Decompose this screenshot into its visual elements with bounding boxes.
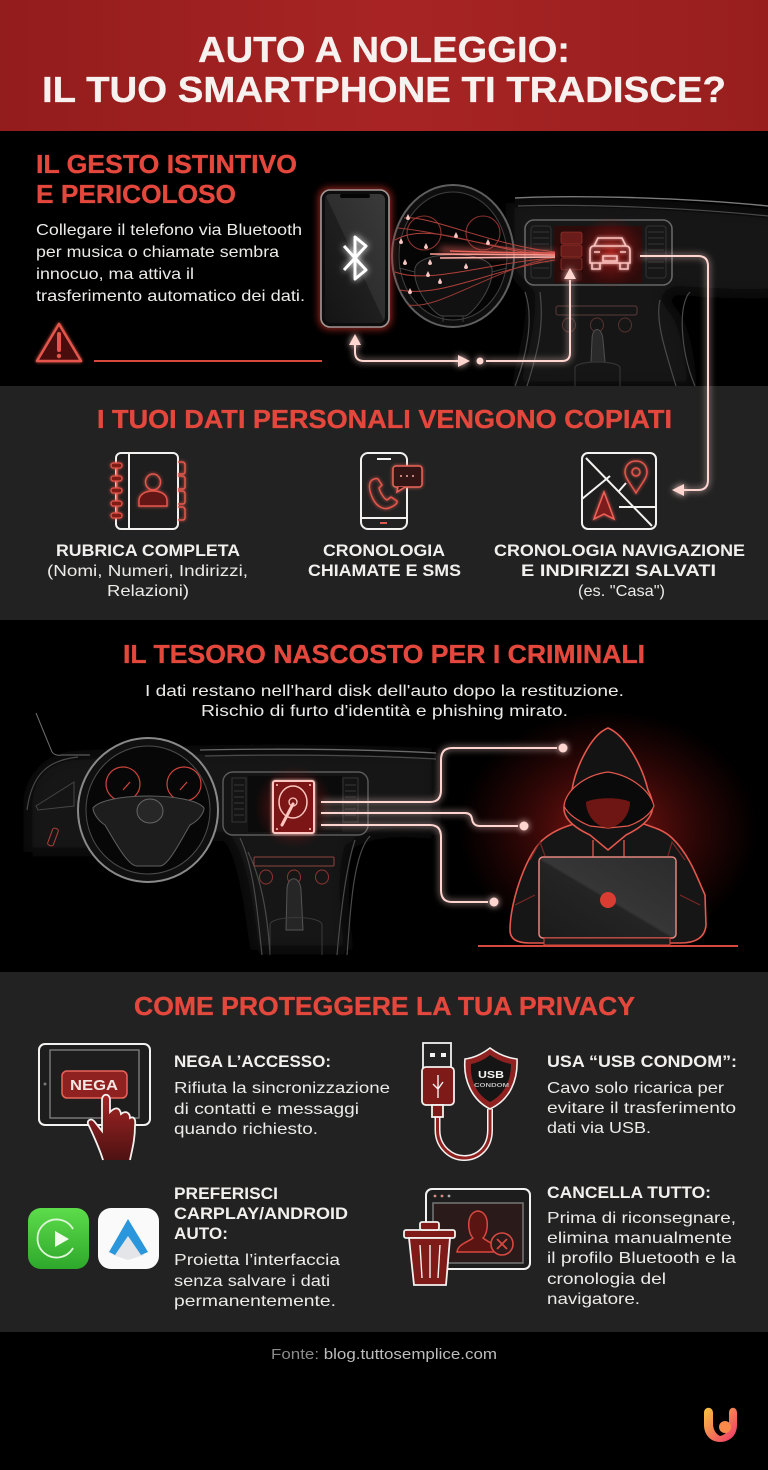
text: nega accesso	[174, 1053, 390, 1138]
label: chiamate: CRONOLOGIA	[323, 542, 445, 560]
title	[42, 29, 726, 110]
heading: il gesto istintivo: E PERICOLOSO	[36, 179, 236, 209]
panel: dati copiati	[0, 386, 768, 620]
text: bluetooth description: innocuo, ma attiva il	[36, 266, 194, 283]
text: cancella tutto: elimina manualmente	[547, 1230, 732, 1247]
text: cancella tutto: CANCELLA TUTTO:	[547, 1184, 711, 1202]
icon: warning triangle	[37, 324, 81, 361]
heading: dati copiati: I TUOI DATI PERSONALI VENGONO COPIATI	[97, 404, 672, 434]
text: rischio: Rischio di furto d'identità e phishing mirato.	[201, 703, 568, 720]
text: rischio	[145, 683, 624, 720]
infotainment screen	[554, 216, 646, 288]
arrow: phone to screen loop	[349, 268, 576, 367]
text: carplay android auto: Proietta l’interfaccia	[174, 1252, 340, 1269]
header band	[0, 0, 768, 131]
heading: tesoro nascosto: IL TESORO NASCOSTO PER I CRIMINALI	[123, 639, 645, 669]
steering wheel	[78, 738, 218, 882]
illustration: car dashboard	[392, 185, 768, 386]
text: bluetooth description: per musica o chiamate sembra	[36, 244, 279, 261]
text: rischio: I dati restano nell'hard disk dell'auto dopo la restituzione.	[145, 683, 624, 700]
text: nega accesso: NEGA L’ACCESSO:	[174, 1053, 331, 1071]
text: carplay android auto: AUTO:	[174, 1225, 228, 1243]
label: rubrica: RUBRICA COMPLETA	[56, 542, 240, 560]
text: cancella tutto: cronologia del	[547, 1271, 666, 1288]
text: bluetooth description: Collegare il telefono via Bluetooth	[36, 222, 302, 239]
icon: car	[590, 238, 630, 269]
text: carplay android auto	[174, 1185, 348, 1310]
icon: logo	[704, 1408, 737, 1442]
text: nega accesso: Rifiuta la sincronizzazione	[174, 1080, 390, 1097]
text: carplay android auto: permanentemente.	[174, 1293, 336, 1310]
steering wheel	[392, 185, 514, 327]
label: rubrica	[47, 542, 248, 600]
text: nega accesso: quando richiesto.	[174, 1121, 318, 1138]
heading: come proteggere: COME PROTEGGERE LA TUA PRIVACY	[134, 991, 635, 1021]
text: usb condom: USA “USB CONDOM”:	[547, 1053, 737, 1071]
text: bluetooth description: trasferimento automatico dei dati.	[36, 288, 305, 305]
icon: usb condom: USB	[478, 1069, 504, 1081]
heading: il gesto istintivo: IL GESTO ISTINTIVO	[36, 149, 297, 179]
panel: tesoro nascosto	[0, 620, 768, 972]
connector lines: disk to hacker	[321, 744, 568, 906]
icon: nega tablet: NEGA	[70, 1077, 118, 1094]
label: chiamate: CHIAMATE E SMS	[308, 562, 461, 580]
text: carplay android auto: PREFERISCI	[174, 1185, 278, 1203]
title: AUTO A NOLEGGIO:	[198, 29, 570, 70]
title: IL TUO SMARTPHONE TI TRADISCE?	[42, 69, 726, 110]
heading: il gesto istintivo	[36, 149, 297, 209]
text: usb condom: dati via USB.	[547, 1120, 651, 1137]
icon: android auto	[98, 1208, 159, 1269]
text: carplay android auto: CARPLAY/ANDROID	[174, 1205, 348, 1223]
icon: map	[582, 453, 656, 529]
label: navigazione: (es. "Casa")	[578, 583, 665, 600]
label: navigazione: CRONOLOGIA NAVIGAZIONE	[494, 542, 745, 560]
icon: trash bin	[404, 1222, 455, 1285]
icon: usb condom	[422, 1043, 517, 1158]
text: cancella tutto: il profilo Bluetooth e la	[547, 1250, 736, 1267]
panel: come proteggere	[0, 972, 768, 1332]
icon: usb condom: CONDOM	[474, 1083, 510, 1089]
panel: il gesto istintivo	[0, 131, 768, 386]
icon: address book	[111, 453, 185, 529]
label: navigazione	[494, 542, 745, 600]
icon: nega tablet	[39, 1044, 150, 1160]
text: carplay android auto: senza salvare i dati	[174, 1273, 330, 1290]
icon: bluetooth	[344, 237, 366, 279]
icon: delete profile	[404, 1189, 530, 1285]
text: nega accesso: di contatti e messaggi	[174, 1101, 359, 1118]
text: usb condom: Cavo solo ricarica per	[547, 1080, 725, 1097]
icon: hand	[88, 1095, 135, 1160]
label: navigazione: E INDIRIZZI SALVATI	[521, 562, 716, 580]
icon: hard disk	[254, 765, 334, 849]
warning underline	[94, 360, 322, 362]
label: rubrica: Relazioni)	[107, 583, 189, 600]
text: cancella tutto: navigatore.	[547, 1291, 640, 1308]
label: rubrica: (Nomi, Numeri, Indirizzi,	[47, 563, 248, 580]
text: bluetooth description	[36, 222, 305, 305]
text: usb condom	[547, 1053, 737, 1137]
text: cancella tutto	[547, 1184, 736, 1308]
icon: phone and sms	[361, 453, 422, 529]
illustration: hacker	[458, 710, 758, 950]
footer source: Fonte: blog.tuttosemplice.com	[271, 1346, 497, 1363]
label: chiamate	[308, 542, 461, 580]
icon: carplay	[28, 1208, 89, 1269]
text: cancella tutto: Prima di riconsegnare,	[547, 1210, 736, 1227]
arrow: car screen to map	[640, 256, 708, 496]
data stream lines	[395, 214, 555, 305]
text: usb condom: evitare il trasferimento	[547, 1100, 736, 1117]
illustration: car dashboard	[27, 713, 436, 955]
phone with bluetooth icon	[319, 188, 391, 329]
